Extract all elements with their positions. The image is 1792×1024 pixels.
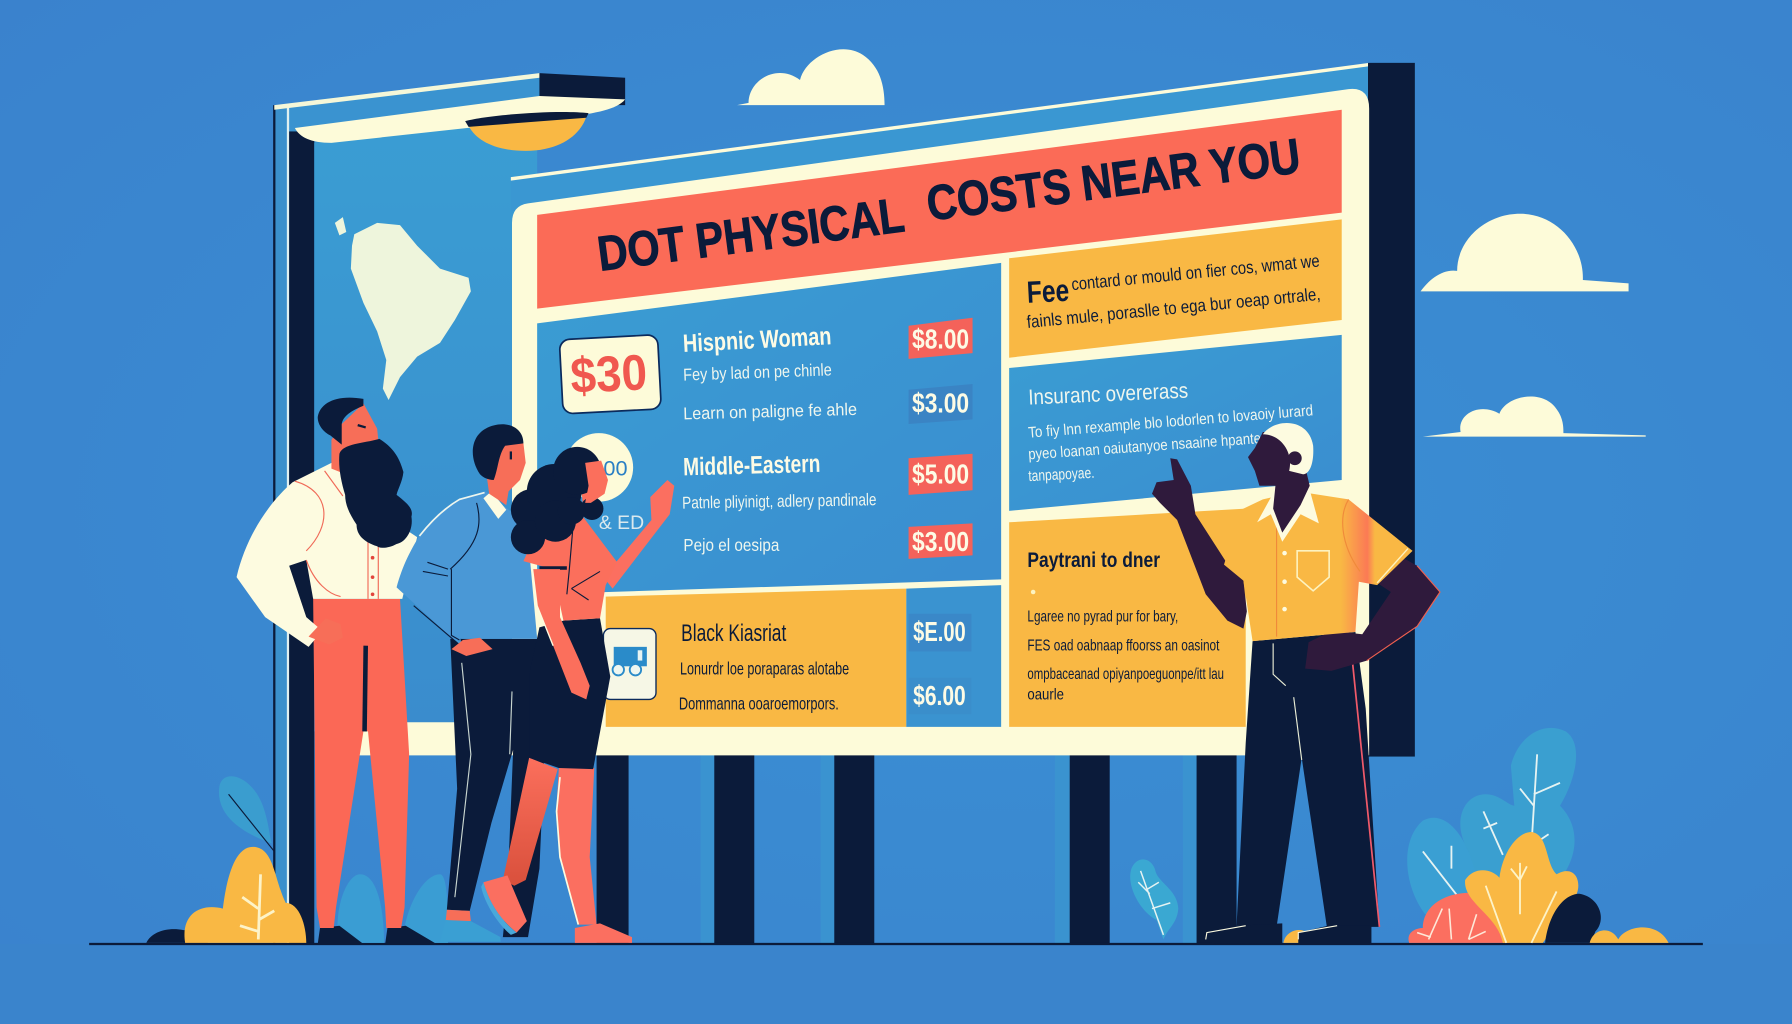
back leg and shoe: [503, 758, 558, 886]
text: [1028, 402, 1314, 485]
person: woman: [481, 447, 674, 943]
heading: Insuranc overerass: [1028, 378, 1189, 410]
circle badge: & ED: [599, 512, 644, 534]
price tags: [909, 614, 971, 714]
map of South America: [335, 217, 471, 400]
cloud: top: [737, 49, 885, 105]
icon: vehicle card: [603, 629, 656, 699]
panel: title banner: [537, 110, 1342, 309]
hair: [318, 398, 363, 445]
face: [486, 443, 526, 505]
item text: Learn on paligne fe ahle: [683, 399, 857, 423]
ear: [1288, 451, 1302, 465]
top: [523, 517, 617, 621]
circle badge: 00: [603, 455, 628, 480]
hand: [309, 618, 343, 645]
person: pointing man: [1152, 423, 1440, 944]
item text: Fey by lad on pe chinle: [683, 359, 832, 385]
item text: Patnle pliyinigt, adlery pandinale: [682, 489, 877, 513]
billboard: [357, 63, 1415, 757]
buttons: [1282, 551, 1287, 611]
price tags: $5.00: [912, 458, 969, 489]
front shoe: [575, 923, 632, 943]
item heading: Middle-Eastern: Middle-Eastern: [683, 450, 821, 481]
item text: [682, 489, 877, 555]
shirt: [237, 463, 417, 647]
plant: center: [1130, 859, 1178, 939]
text: fainls mule, poraslle to ega bur oeap ortrale,: [1026, 284, 1321, 332]
heading: [594, 130, 1303, 282]
text: Lgaree no pyrad pur for bary,: [1027, 609, 1178, 626]
circle badge: [565, 433, 644, 534]
ground line: [89, 943, 1703, 945]
text: [1026, 250, 1321, 332]
neck and face: [1248, 432, 1310, 533]
collar: [483, 491, 506, 519]
face: [579, 463, 607, 505]
badge: $30: $30: [569, 343, 648, 404]
text: contard or mould on fier cos, wmat we: [1070, 250, 1320, 294]
text: ompbaceanad opiyanpoeguonpe/itt lau: [1027, 666, 1224, 683]
item text: [679, 658, 849, 714]
panel: Black Kiasriat: [603, 585, 1001, 727]
beard: [339, 439, 412, 548]
plants: right: [1283, 728, 1669, 943]
item text: [683, 359, 857, 423]
shoes: [1206, 923, 1371, 944]
heading: Fee: [1026, 273, 1070, 310]
billboard cream face: [357, 89, 1369, 755]
text: FES oad oabnaap ffoorss an oasinot: [1027, 637, 1220, 654]
cloud: right upper: [1421, 214, 1629, 291]
skirt: [529, 618, 610, 769]
panel: price list: [537, 263, 1001, 594]
item text: Pejo el oesipa: [683, 535, 780, 555]
lamp post and back panel: [273, 73, 539, 944]
raised arm: [1152, 458, 1247, 629]
item heading: Black Kiasriat: [681, 620, 787, 647]
price tags: $6.00: [913, 680, 966, 711]
price tags: $3.00: [912, 526, 969, 557]
text: [1027, 609, 1224, 703]
panel: Fee: [1009, 219, 1342, 358]
person: man in blue: [397, 424, 544, 942]
front leg: [557, 768, 597, 925]
eye: [358, 425, 366, 427]
panel: Insurance: [1009, 335, 1342, 511]
text: To fiy lnn rexample blo lodorlen to lovaoiy lurard: [1028, 402, 1314, 442]
cloud: right lower: [1423, 397, 1646, 437]
ankle and shoe: [446, 910, 471, 921]
hanging arm: [533, 569, 590, 699]
plants: left: [146, 776, 448, 943]
trousers: [1237, 632, 1379, 927]
trousers: [313, 599, 409, 928]
heading: Paytrani to dner: [1027, 547, 1160, 572]
billboard dark side: [1368, 63, 1415, 757]
support posts: [597, 754, 1237, 944]
neck and face: [331, 403, 378, 473]
person: bearded man: [237, 398, 437, 944]
trousers: [447, 639, 544, 937]
heading: COSTS NEAR YOU: [924, 130, 1303, 231]
hand: [451, 638, 493, 656]
price column: [906, 585, 1001, 727]
heading: DOT PHYSICAL: [594, 188, 907, 282]
pocket: [1297, 551, 1329, 591]
item text: Dommanna ooaroemorpors.: [679, 694, 839, 714]
shoes: [318, 926, 437, 944]
raised arm: [603, 480, 674, 589]
hair: [473, 424, 523, 480]
collar: [1257, 486, 1319, 542]
billboard back edge: [511, 63, 1415, 757]
price tags: [909, 318, 973, 559]
price tags: $3.00: [912, 388, 969, 419]
hair: [1263, 423, 1313, 474]
item text: Lonurdr loe poraparas alotabe: [680, 658, 849, 678]
panel: Payment: [1009, 509, 1246, 727]
right arm: [1305, 554, 1440, 671]
text: tanpapoyae.: [1028, 465, 1095, 485]
shirt: [1224, 491, 1413, 641]
text: pyeo loanan oaiutanyoe nsaaine hpanter: [1028, 430, 1266, 463]
hair: [511, 447, 603, 554]
shirt: [397, 491, 537, 647]
badge: $30: [559, 335, 661, 414]
price tags: $8.00: [912, 324, 969, 355]
item heading: Hispanic Woman: Hispnic Woman: [682, 322, 832, 358]
price tags: $E.00: [913, 616, 966, 647]
eye: [510, 451, 512, 459]
text: oaurle: [1027, 686, 1064, 703]
lamp head: [295, 73, 625, 151]
